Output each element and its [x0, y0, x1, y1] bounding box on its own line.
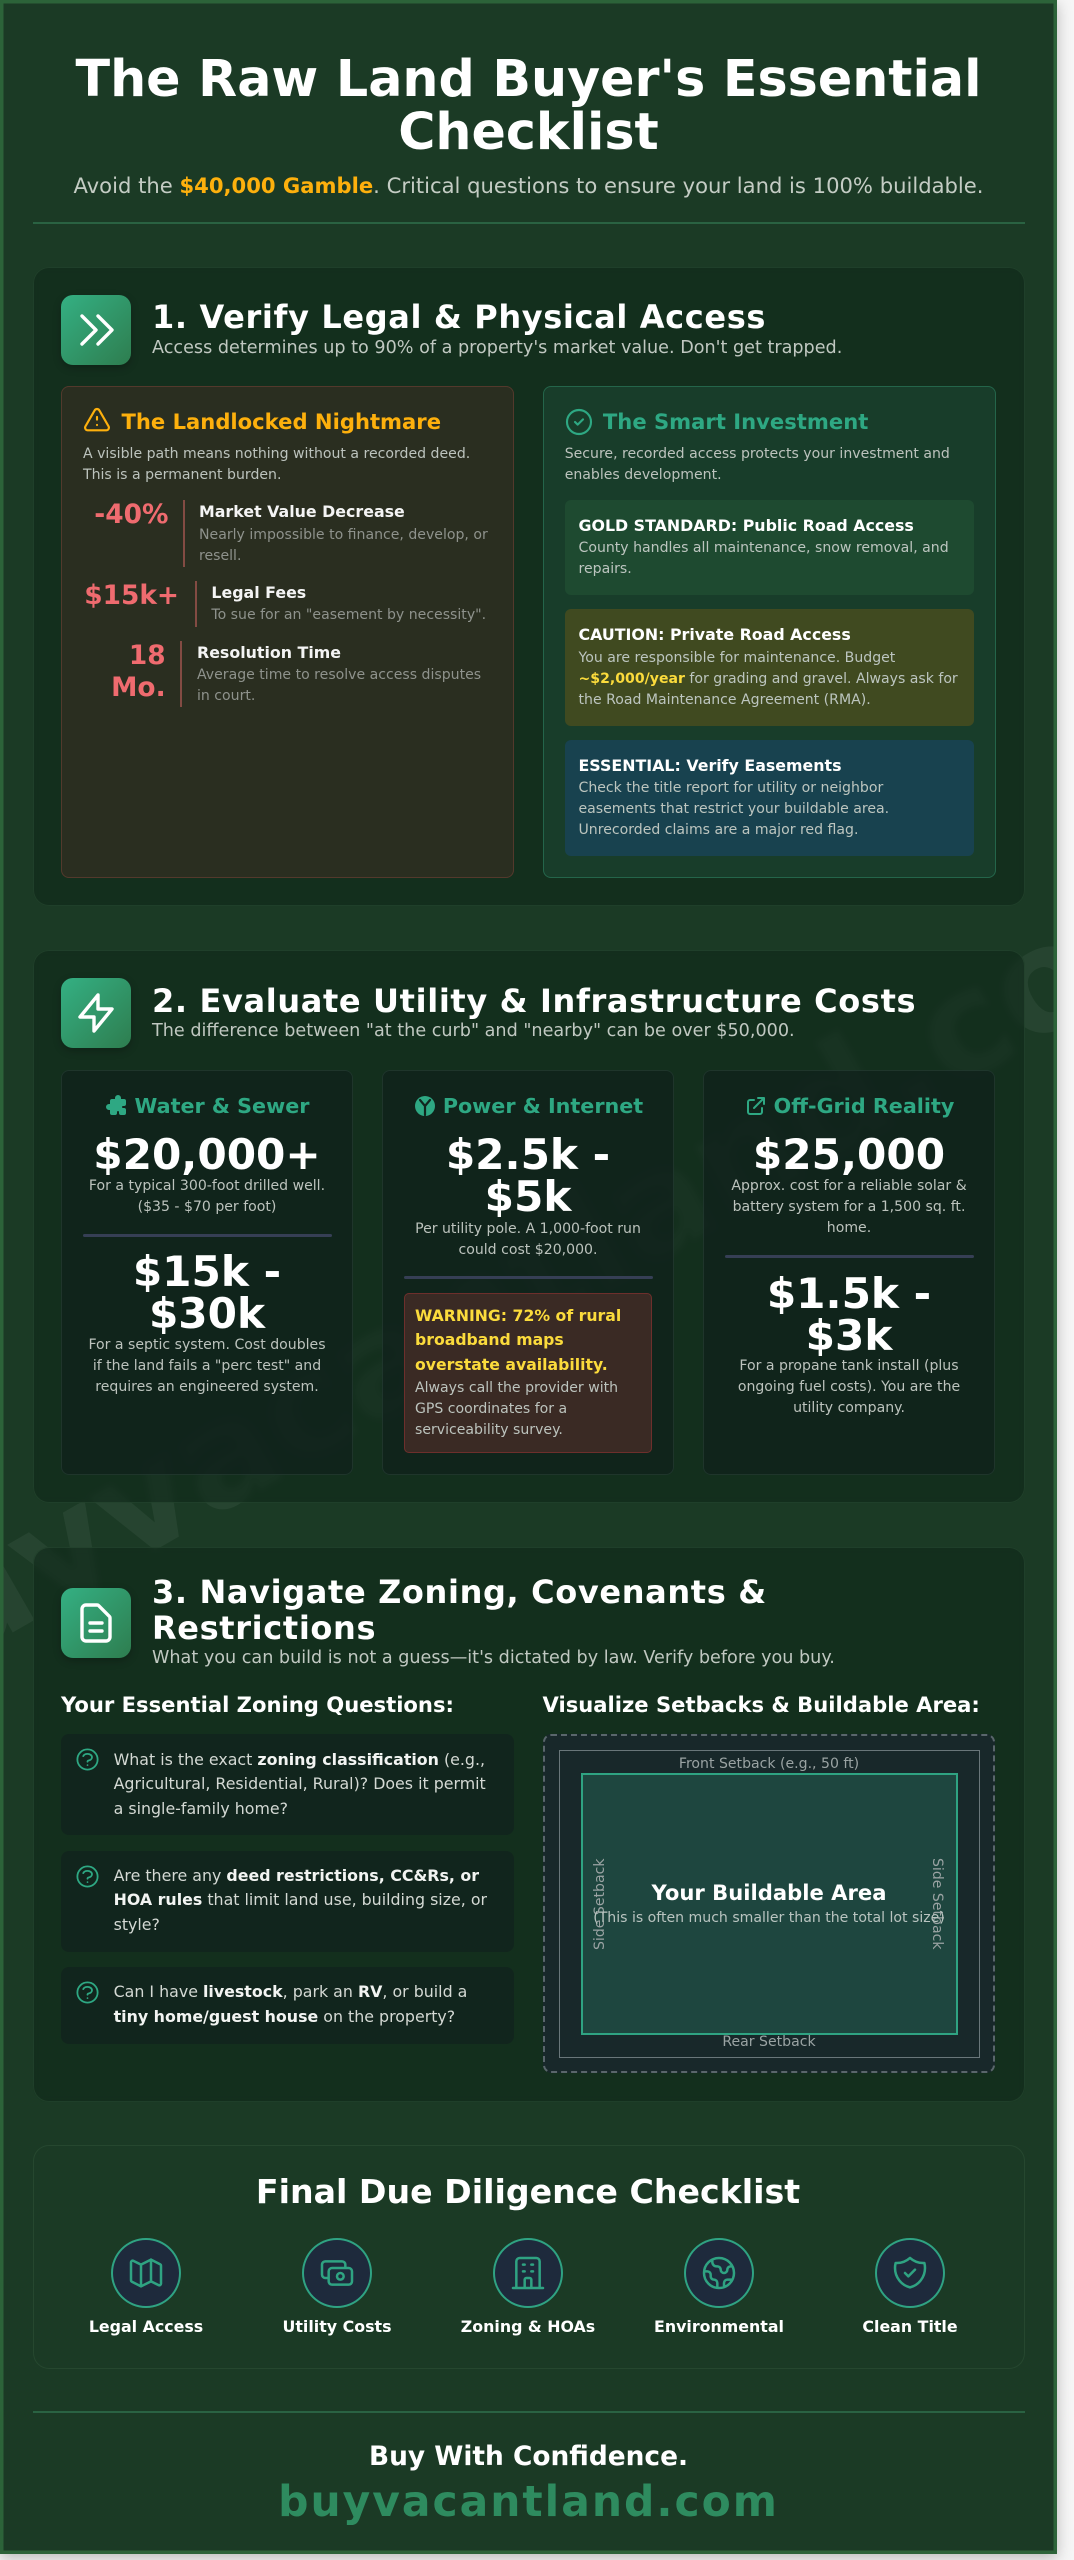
footer brand: buyvacantland.com — [278, 2477, 779, 2526]
warning headline: WARNING: 72% of rural — [415, 1306, 621, 1325]
callout title: ESSENTIAL: Verify Easements — [578, 756, 842, 775]
panel: power and internet — [382, 1070, 674, 1475]
icon: building — [493, 2238, 563, 2308]
question text: Can I have livestock, park an RV, or build a — [114, 1982, 467, 2001]
cost: utility pole: $2.5k - — [446, 1130, 610, 1179]
warning text: serviceability survey. — [415, 1422, 563, 1438]
stat description: Nearly impossible to finance, develop, or — [199, 526, 488, 542]
question text: tiny home/guest house on the property? — [114, 2007, 455, 2026]
warning headline: overstate availability. — [415, 1355, 608, 1374]
icon: shield — [875, 2238, 945, 2308]
card intro text: Secure, recorded access protects your investment and — [565, 446, 950, 462]
question text: What is the exact zoning classification (e.g., — [114, 1750, 485, 1769]
icon: check circle — [566, 408, 592, 436]
item label: Environmental — [654, 2317, 784, 2336]
cost note: solar — [731, 1178, 967, 1236]
callout text — [578, 540, 949, 577]
warning text: Always call the provider with — [415, 1380, 618, 1396]
front setback label: Front Setback (e.g., 50 ft) — [679, 1756, 859, 1772]
cost note: propane: utility company. — [793, 1400, 905, 1416]
question 2 — [61, 1850, 514, 1952]
cost: utility pole — [446, 1130, 610, 1221]
cost note: solar: Approx. cost for a reliable solar & — [731, 1178, 967, 1194]
icon: warning triangle — [84, 408, 110, 432]
callout: caution — [564, 609, 974, 726]
callout text: easements that restrict your buildable area. — [578, 801, 889, 817]
question text: style? — [114, 1915, 160, 1934]
callout text — [578, 650, 958, 708]
cost note: utility pole: could cost $20,000. — [458, 1242, 597, 1258]
card heading: The Landlocked Nightmare — [122, 409, 441, 434]
cost note: well: ($35 - $70 per foot) — [138, 1199, 276, 1215]
question text: a single-family home? — [114, 1799, 288, 1818]
question 3 — [61, 1966, 514, 2044]
item label: Utility Costs — [282, 2317, 392, 2336]
warning headline: broadband maps — [415, 1330, 564, 1349]
panel: section 3 zoning — [33, 1546, 1025, 2102]
cost: drilled well: $20,000+ — [93, 1130, 321, 1179]
stat description: in court. — [197, 688, 255, 704]
question 1 — [61, 1734, 514, 1835]
panel: off-grid reality — [703, 1070, 995, 1475]
questions heading: Your Essential Zoning Questions: — [61, 1692, 454, 1717]
cost: propane: $1.5k - — [767, 1269, 931, 1318]
cost note: propane: For a propane tank install (plus — [739, 1358, 959, 1374]
cost note: septic — [88, 1336, 326, 1394]
question text: HOA rules that limit land use, building size, or — [114, 1890, 487, 1909]
card heading with puzzle icon: Water & Sewer — [135, 1094, 309, 1118]
panel: water and sewer — [61, 1070, 353, 1475]
item: environmental — [654, 2238, 784, 2336]
icon: document — [61, 1588, 131, 1658]
panel: final checklist — [33, 2145, 1025, 2369]
callout text: the Road Maintenance Agreement (RMA). — [578, 692, 871, 708]
card intro text: enables development. — [565, 466, 722, 482]
warning text: GPS coordinates for a — [415, 1400, 567, 1416]
stat title: market value decrease: Market Value Decrease — [199, 502, 405, 521]
item label: Legal Access — [89, 2317, 203, 2336]
cost note: propane — [738, 1358, 960, 1416]
icon: globe — [684, 2238, 754, 2308]
item label: Zoning & HOAs — [461, 2317, 595, 2336]
cost note: septic: requires an engineered system. — [95, 1378, 319, 1394]
buildable area title: Your Buildable Area — [652, 1880, 886, 1905]
cost note: septic: if the land fails a "perc test" and — [93, 1358, 321, 1374]
panel: section 2 utility costs — [33, 950, 1025, 1503]
stat title: legal fees: Legal Fees — [211, 583, 306, 602]
cost note: well: For a typical 300-foot drilled well. — [89, 1178, 325, 1194]
stat description: resell. — [199, 548, 241, 564]
callout: essential — [564, 740, 974, 856]
stat description: To sue for an "easement by necessity". — [211, 607, 486, 623]
question text: Are there any deed restrictions, CC&Rs, or — [114, 1866, 479, 1885]
warning text — [415, 1380, 618, 1438]
cost: septic: $30k — [149, 1289, 265, 1338]
warning headline — [415, 1306, 621, 1374]
panel: smart investment — [542, 386, 996, 878]
panel: section 1 legal and physical access — [33, 267, 1025, 906]
buildable area note: (This is often much smaller than the total lot size) — [593, 1910, 945, 1926]
cost note: solar: home. — [827, 1220, 871, 1236]
icon: question mark — [76, 1748, 98, 1770]
right side setback label: Side Setback — [929, 1858, 945, 1950]
item: clean title — [862, 2238, 958, 2336]
callout title: CAUTION: Private Road Access — [578, 625, 851, 644]
buildable area — [581, 1773, 958, 2035]
stat: resolution time — [111, 640, 166, 703]
cost note: well — [89, 1178, 325, 1215]
left side setback label: Side Setback — [592, 1858, 608, 1950]
question text — [114, 1866, 487, 1934]
section 3 heading: 3. Navigate Zoning, Covenants & — [152, 1573, 767, 1611]
item: utility costs — [282, 2238, 392, 2336]
header subtitle: Avoid the $40,000 Gamble. Critical questions to ensure your land is 100% buildable. — [73, 173, 984, 198]
footer tagline: Buy With Confidence. — [369, 2441, 688, 2472]
item label: Clean Title — [862, 2317, 958, 2336]
callout text: You are responsible for maintenance. Budget — [578, 650, 895, 666]
callout text: County handles all maintenance, snow removal, and — [578, 540, 949, 556]
stat: market value: -40% — [94, 499, 168, 530]
card heading with external link icon: Off-Grid Reality — [774, 1094, 954, 1118]
cost note: utility pole: Per utility pole. A 1,000-foot run — [415, 1220, 641, 1236]
checklist heading: Final Due Diligence Checklist — [256, 2172, 800, 2211]
callout: broadband warning — [404, 1293, 652, 1453]
cost: utility pole: $5k — [485, 1172, 571, 1221]
item: legal access — [89, 2238, 203, 2336]
cost: septic — [133, 1247, 281, 1338]
icon: cash — [302, 2238, 372, 2308]
callout text: ~$2,000/year for grading and gravel. Always ask for — [578, 670, 958, 686]
section 3 subtitle: What you can build is not a guess—it's dictated by law. Verify before you buy. — [152, 1648, 835, 1668]
icon: question mark — [76, 1866, 98, 1888]
section 3 heading: Restrictions — [152, 1609, 376, 1647]
cost: septic: $15k - — [133, 1247, 281, 1296]
cost: propane: $3k — [806, 1311, 892, 1360]
cost note: utility pole — [415, 1220, 641, 1258]
stat description: Average time to resolve access disputes — [197, 667, 481, 683]
callout: gold standard — [564, 500, 974, 595]
section 3 heading — [152, 1573, 767, 1647]
card intro text: This is a permanent burden. — [83, 466, 281, 482]
icon: double chevron — [61, 295, 131, 365]
section 2 heading: 2. Evaluate Utility & Infrastructure Costs — [152, 982, 916, 1020]
header title: Checklist — [398, 102, 659, 161]
section 2 subtitle: The difference between "at the curb" and "nearby" can be over $50,000. — [152, 1021, 795, 1041]
card intro text — [565, 446, 950, 482]
cost note: propane: ongoing fuel costs). You are the — [738, 1378, 960, 1394]
callout text: repairs. — [578, 561, 632, 577]
callout text: Check the title report for utility or neighbor — [578, 780, 883, 796]
question text: Agricultural, Residential, Rural)? Does it permit — [114, 1774, 486, 1793]
stat: legal fees: $15k+ — [84, 580, 179, 611]
icon: map — [111, 2238, 181, 2308]
cost note: septic: For a septic system. Cost doubles — [88, 1336, 326, 1352]
card heading with globe icon: Power & Internet — [443, 1094, 643, 1118]
callout text — [578, 780, 889, 838]
section 1 heading: 1. Verify Legal & Physical Access — [152, 298, 766, 336]
panel: landlocked nightmare — [61, 386, 514, 878]
question text — [114, 1982, 467, 2026]
diagram: setbacks and buildable area — [543, 1734, 995, 2073]
stat: resolution time: Mo. — [111, 672, 166, 703]
card intro text — [82, 446, 470, 482]
stat description — [197, 667, 481, 704]
header title: The Raw Land Buyer's Essential — [76, 49, 982, 108]
stat title: resolution time: Resolution Time — [197, 643, 341, 662]
rear setback label: Rear Setback — [722, 2034, 816, 2050]
callout text: Unrecorded claims are a major red flag. — [578, 822, 858, 838]
item: zoning and HOAs — [461, 2238, 595, 2336]
cost: propane — [767, 1269, 931, 1360]
icon: question mark — [76, 1982, 98, 2004]
icon: lightning bolt — [61, 978, 131, 1048]
cost: solar: $25,000 — [753, 1130, 945, 1179]
cost note: solar: battery system for a 1,500 sq. ft. — [733, 1199, 965, 1215]
card heading: The Smart Investment — [603, 409, 868, 434]
callout title: GOLD STANDARD: Public Road Access — [578, 516, 914, 535]
setbacks heading: Visualize Setbacks & Buildable Area: — [542, 1692, 980, 1717]
stat description — [199, 526, 488, 564]
header title — [76, 49, 982, 161]
stat: resolution time: 18 — [129, 640, 166, 671]
section 1 subtitle: Access determines up to 90% of a property's market value. Don't get trapped. — [152, 338, 842, 358]
card intro text: A visible path means nothing without a recorded deed. — [83, 446, 470, 462]
question text — [114, 1750, 486, 1818]
